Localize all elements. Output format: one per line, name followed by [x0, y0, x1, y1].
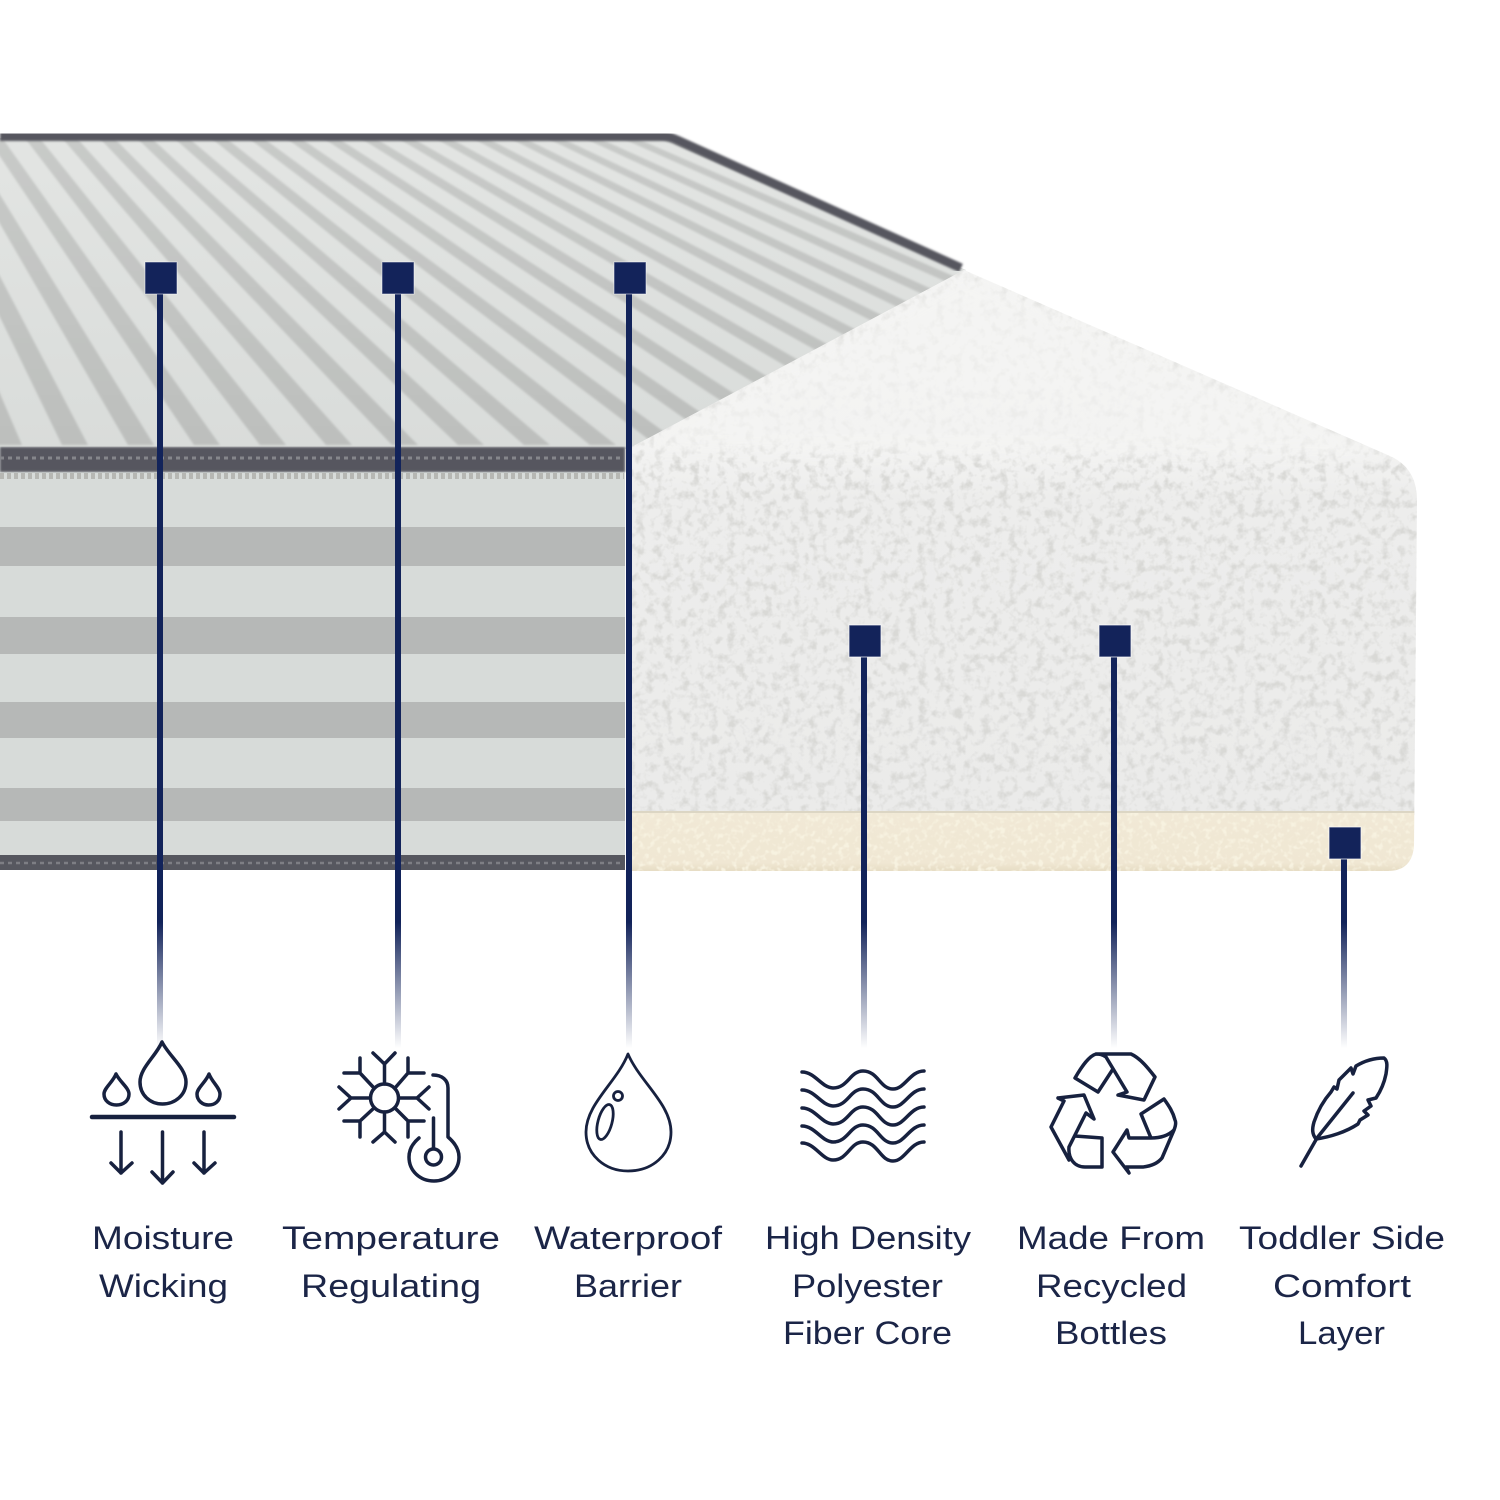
- label: high density polyester fiber core: High Density: [765, 1220, 971, 1256]
- label: made from recycled bottles: Bottles: [1055, 1315, 1167, 1351]
- cream comfort layer: [620, 811, 1425, 872]
- pointer: toddler side: [1329, 827, 1361, 1050]
- foam core block: [620, 265, 1425, 872]
- pointer: moisture wicking: [145, 262, 177, 1050]
- upper dark binding: [0, 447, 625, 476]
- label: toddler side comfort layer: Toddler Side: [1239, 1220, 1445, 1256]
- label: waterproof barrier: [534, 1220, 722, 1304]
- icon: moisture wicking: [92, 1042, 234, 1183]
- grey knit bands: [0, 527, 625, 821]
- pointer: high density core: [849, 625, 881, 1050]
- mattress side: striped knit cover: [0, 447, 625, 870]
- icon: water drop: [586, 1054, 671, 1171]
- label: temperature regulating: Regulating: [301, 1268, 481, 1304]
- label: made from recycled bottles: Recycled: [1036, 1268, 1187, 1304]
- mattress top surface with radiating stripes: [0, 134, 966, 449]
- label: temperature regulating: [282, 1220, 500, 1304]
- label: made from recycled bottles: Made From: [1017, 1220, 1205, 1256]
- pointer: waterproof barrier: [614, 262, 646, 1050]
- lower dark binding: [0, 855, 625, 870]
- icon: snowflake and thermometer: [339, 1053, 459, 1181]
- label: high density polyester fiber core: [765, 1220, 971, 1351]
- icon: waves: [802, 1071, 924, 1161]
- pointer: temperature regulating: [382, 262, 414, 1050]
- label: toddler side comfort layer: Layer: [1298, 1315, 1385, 1351]
- label: moisture wicking: Wicking: [99, 1268, 228, 1304]
- label: high density polyester fiber core: Fiber Core: [783, 1315, 952, 1351]
- label: temperature regulating: Temperature: [282, 1220, 500, 1256]
- label: high density polyester fiber core: Polyester: [792, 1268, 943, 1304]
- top edge piping: [0, 136, 961, 268]
- label: toddler side comfort layer: [1239, 1220, 1445, 1351]
- label: moisture wicking: Moisture: [92, 1220, 234, 1256]
- icon: feather: [1301, 1058, 1387, 1166]
- label: toddler side comfort layer: Comfort: [1273, 1268, 1411, 1304]
- pointer: recycled bottles: [1099, 625, 1131, 1050]
- label: waterproof barrier: Waterproof: [534, 1220, 722, 1256]
- icon: recycle arrows: [1051, 1054, 1176, 1173]
- label: waterproof barrier: Barrier: [574, 1268, 682, 1304]
- label: made from recycled bottles: [1017, 1220, 1205, 1351]
- label: moisture wicking: [92, 1220, 234, 1304]
